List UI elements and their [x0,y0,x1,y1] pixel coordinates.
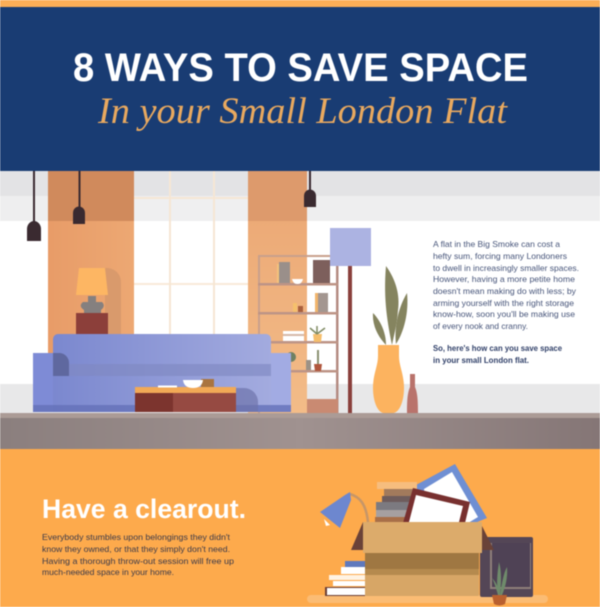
intro text: of every nook and cranny. [433,321,528,331]
table lamp [76,268,121,334]
clearout heading: Have a clearout. [42,494,246,524]
intro text: However, having a more petite home [433,274,575,284]
wall bands [0,171,600,449]
floor [0,413,600,449]
window [134,171,248,334]
header band [0,7,600,171]
floor lamp [330,228,371,413]
sofa [33,334,291,412]
clearout text [42,532,234,577]
coffee table [135,379,236,412]
pendant lamps [27,171,316,241]
shelf [307,595,548,603]
intro text: in your small London flat. [433,355,529,365]
subtitle: In your Small London Flat [97,91,509,132]
clearout text: Having a thorough throw-out session will free up [42,556,234,566]
intro text: So, here's how can you save space [433,343,562,353]
small plant [492,562,507,606]
top orange strip [0,0,600,7]
small bottle [407,374,418,413]
clearout text: know they owned, or that they simply don't need. [42,544,230,554]
monitor [480,537,533,597]
icon: moving box illustration [307,464,548,606]
clearout panel [0,449,600,607]
room scene [0,171,600,449]
right curtain [248,171,307,413]
intro text: know-how, soon you'll be making use [433,309,575,319]
intro text: to dwell in increasingly smaller spaces. [433,263,579,273]
bookshelf [258,255,338,413]
maroon frame [403,488,470,523]
intro text: doesn't mean making do with less; by [433,286,577,296]
plant vase [373,266,407,413]
blue frame [416,464,487,525]
lamp [320,492,368,528]
intro text [433,239,579,365]
intro text: arming yourself with the right storage [433,298,574,308]
title: 8 WAYS TO SAVE SPACE [73,46,528,90]
clearout text: much-needed space in your home. [42,567,174,577]
stacked books in box [375,482,417,523]
books pile [325,561,365,596]
left curtain [48,171,134,356]
intro text: hefty sum, forcing many Londoners [433,251,567,261]
clearout text: Everybody stumbles upon belongings they didn't [42,532,231,542]
box [351,522,494,596]
intro text: A flat in the Big Smoke can cost a [433,239,560,249]
